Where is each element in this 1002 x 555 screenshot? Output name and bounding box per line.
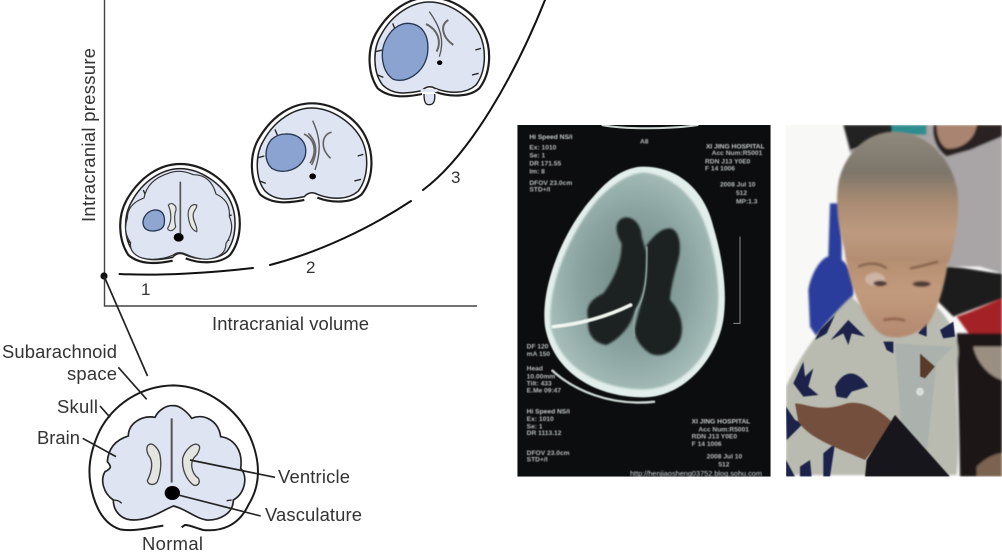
head	[837, 132, 958, 337]
film annotations: Im: 8	[529, 168, 545, 175]
diagram labels: Ventricle	[278, 466, 350, 487]
film annotations: DR 1113.12	[527, 430, 562, 437]
curve stage numbers	[141, 168, 460, 299]
CT scan photo	[517, 125, 771, 478]
curve stage numbers: 1	[141, 280, 150, 299]
photo of child with enlarged head	[786, 125, 1002, 477]
film annotations: STD+/I	[529, 187, 550, 194]
ventricles	[147, 444, 200, 485]
film annotations: DF 120	[527, 343, 549, 350]
film annotations: RDN J13 Y0E0	[705, 158, 751, 165]
y-axis label: Intracranial pressure	[78, 48, 99, 222]
film annotations: A8	[640, 138, 649, 145]
film annotations: STD+/I	[527, 457, 548, 464]
diagram labels: Skull	[57, 396, 98, 417]
film annotations: Se: 1	[529, 152, 546, 159]
brain outline	[103, 406, 245, 520]
scale bar	[733, 237, 740, 323]
dark arm and red sleeve	[937, 267, 1002, 317]
diagram labels	[2, 341, 362, 554]
film annotations: 2008 Jul 10	[707, 453, 742, 460]
shunt catheter	[553, 305, 631, 327]
film annotations: 512	[718, 462, 730, 469]
head on CT	[544, 167, 725, 397]
ventricles on CT	[587, 217, 682, 355]
sweater leaf prints	[786, 315, 955, 477]
film annotations: Acc Num:R5001	[698, 427, 749, 434]
film annotations: DR 171.55	[529, 160, 561, 167]
brain stage 2	[252, 103, 371, 202]
film annotations: XI JING HOSPITAL	[706, 143, 765, 150]
brain fold marks	[113, 500, 232, 503]
vasculature	[165, 486, 180, 500]
film annotations: RDN J13 Y0E0	[692, 433, 737, 440]
film annotations: 10.00mm	[527, 373, 555, 380]
facial features	[858, 262, 938, 321]
curve stage numbers: 3	[451, 168, 460, 187]
adult in background	[843, 125, 1002, 273]
midline septum	[634, 247, 647, 337]
film annotations: DFOV 23.0cm	[529, 180, 572, 187]
pressure-volume curve	[120, 0, 545, 275]
film annotations: Tilt: 433	[527, 380, 552, 387]
diagram labels: Normal	[142, 533, 203, 554]
headrest arc	[552, 370, 655, 403]
brain tissue	[550, 173, 718, 389]
film annotations: 2008 Jul 10	[720, 182, 756, 189]
watermark: http://henjiaosheng03752.blog.sohu.com	[630, 469, 762, 478]
leader lines	[83, 367, 275, 516]
brain stage 1	[120, 164, 240, 263]
film annotations: Ex: 1010	[527, 416, 554, 423]
top film arc	[602, 125, 698, 128]
film annotations: mA 150	[527, 351, 550, 358]
diagram labels: space	[67, 363, 117, 384]
diagram labels: Vasculature	[265, 504, 362, 525]
diagram labels: Subarachnoid	[2, 341, 117, 362]
film annotations: E.Me 09:47	[527, 388, 561, 395]
brain stage 3 with herniation	[370, 0, 489, 105]
film annotations: XI JING HOSPITAL	[692, 418, 750, 425]
film annotations: Ex: 1010	[529, 144, 557, 151]
origin point and leader line	[100, 272, 148, 376]
film annotations: Hi Speed NS/i	[529, 134, 573, 141]
skull outline	[89, 385, 258, 530]
film annotations: Hi Speed NS/i	[527, 408, 570, 415]
film annotations: Se: 1	[527, 423, 543, 430]
graph axes	[104, 0, 477, 306]
film annotations: Acc Num:R5001	[712, 150, 763, 157]
blue clothing	[808, 203, 854, 337]
sweater	[786, 297, 958, 475]
curve stage numbers: 2	[306, 258, 315, 277]
film annotations	[527, 134, 765, 469]
film annotations: DFOV 23.0cm	[527, 450, 570, 457]
film annotations: F 14 1006	[692, 441, 722, 448]
diagram labels: Brain	[37, 427, 80, 448]
film annotations: MP:1.3	[736, 198, 758, 205]
adult hand and black sleeve	[795, 403, 950, 477]
placket and skin gap	[895, 343, 953, 453]
film annotations: 512	[736, 190, 747, 197]
x-axis label: Intracranial volume	[212, 313, 369, 334]
film annotations: Head	[527, 366, 543, 373]
midline	[169, 418, 175, 483]
film annotations: F 14 1006	[705, 166, 735, 173]
normal brain diagram	[83, 367, 275, 530]
